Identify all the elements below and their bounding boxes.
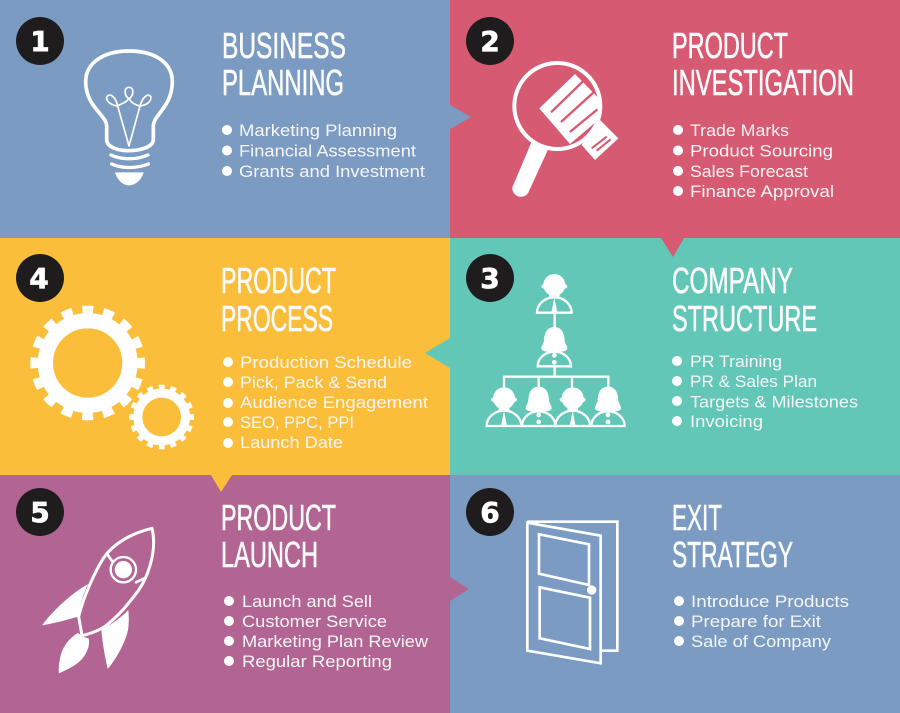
bullet list: SEO, PPC, PPI xyxy=(240,414,354,432)
heading: STRUCTURE xyxy=(672,298,817,339)
heading: PROCESS xyxy=(221,298,333,339)
badge 3: 3 xyxy=(480,262,500,295)
panel 3: company structure xyxy=(450,238,900,475)
heading xyxy=(672,25,854,103)
icon: rocket xyxy=(42,528,154,673)
bullet list: Sale of Company xyxy=(691,633,832,651)
heading: STRATEGY xyxy=(672,534,793,575)
bullet list: Financial Assessment xyxy=(239,142,416,160)
badge 5 xyxy=(16,488,64,536)
bullet list: Product Sourcing xyxy=(690,142,833,160)
panel 2: product investigation xyxy=(450,0,900,238)
panel 5: product launch xyxy=(0,475,450,713)
badge 2: 2 xyxy=(480,25,500,58)
heading: COMPANY xyxy=(672,260,793,301)
bullet list: Launch Date xyxy=(240,434,343,452)
bullet list xyxy=(222,122,425,181)
badge 4 xyxy=(16,254,64,302)
badge 2 xyxy=(466,17,514,65)
badge 4: 4 xyxy=(29,262,49,295)
bullet list: Grants and Investment xyxy=(239,163,425,181)
heading xyxy=(221,497,336,575)
badge 6: 6 xyxy=(480,496,500,529)
bullet list: Launch and Sell xyxy=(242,593,372,611)
bullet list: Prepare for Exit xyxy=(691,613,821,631)
bullet list: Targets & Milestones xyxy=(690,394,858,412)
bullet list: PR & Sales Plan xyxy=(690,373,817,391)
heading: EXIT xyxy=(672,497,722,538)
bullet list: Customer Service xyxy=(242,613,387,631)
bullet list: Sales Forecast xyxy=(690,163,808,181)
badge 1: 1 xyxy=(30,25,50,58)
badge 5: 5 xyxy=(30,496,50,529)
heading: PRODUCT xyxy=(672,25,788,66)
bullet list xyxy=(674,593,849,651)
heading: BUSINESS xyxy=(222,25,346,66)
badge 6 xyxy=(466,488,514,536)
badge 3 xyxy=(466,254,514,302)
bullet list: Regular Reporting xyxy=(242,653,392,671)
heading: PRODUCT xyxy=(221,497,336,538)
arrow: step 2 to 3 xyxy=(661,238,684,257)
icon: light bulb xyxy=(86,51,172,185)
bullet list: Invoicing xyxy=(690,413,763,431)
icon: magnifying glass over document xyxy=(512,63,618,197)
bullet list xyxy=(673,122,834,201)
arrow: step 3 to 4 xyxy=(425,338,450,368)
bullet list xyxy=(224,593,428,671)
heading xyxy=(672,260,817,339)
icon: gears xyxy=(35,310,191,447)
panel 1: business planning xyxy=(0,0,450,238)
heading: PLANNING xyxy=(222,62,344,103)
bullet list: Production Schedule xyxy=(240,354,412,372)
arrow: step 1 to 2 xyxy=(450,105,471,129)
bullet list xyxy=(223,354,428,452)
bullet list: Finance Approval xyxy=(690,183,834,201)
badge 1 xyxy=(16,17,64,65)
bullet list: PR Training xyxy=(690,353,782,371)
heading xyxy=(222,25,346,103)
bullet list: Trade Marks xyxy=(690,122,789,140)
heading: PRODUCT xyxy=(221,260,336,301)
heading: LAUNCH xyxy=(221,534,318,575)
panel 6: exit strategy xyxy=(450,475,900,713)
icon: open door xyxy=(527,522,617,663)
panel 4: product process xyxy=(0,238,450,475)
arrow: step 5 to 6 xyxy=(450,577,469,601)
bullet list: Marketing Plan Review xyxy=(242,633,428,651)
heading xyxy=(221,260,336,339)
icon: organisation chart xyxy=(487,274,625,426)
bullet list: Audience Engagement xyxy=(240,394,428,412)
bullet list: Introduce Products xyxy=(691,593,849,611)
bullet list: Marketing Planning xyxy=(239,122,397,140)
bullet list xyxy=(672,353,858,431)
heading xyxy=(672,497,793,575)
bullet list: Pick, Pack & Send xyxy=(240,374,387,392)
arrow: step 4 to 5 xyxy=(211,475,232,492)
